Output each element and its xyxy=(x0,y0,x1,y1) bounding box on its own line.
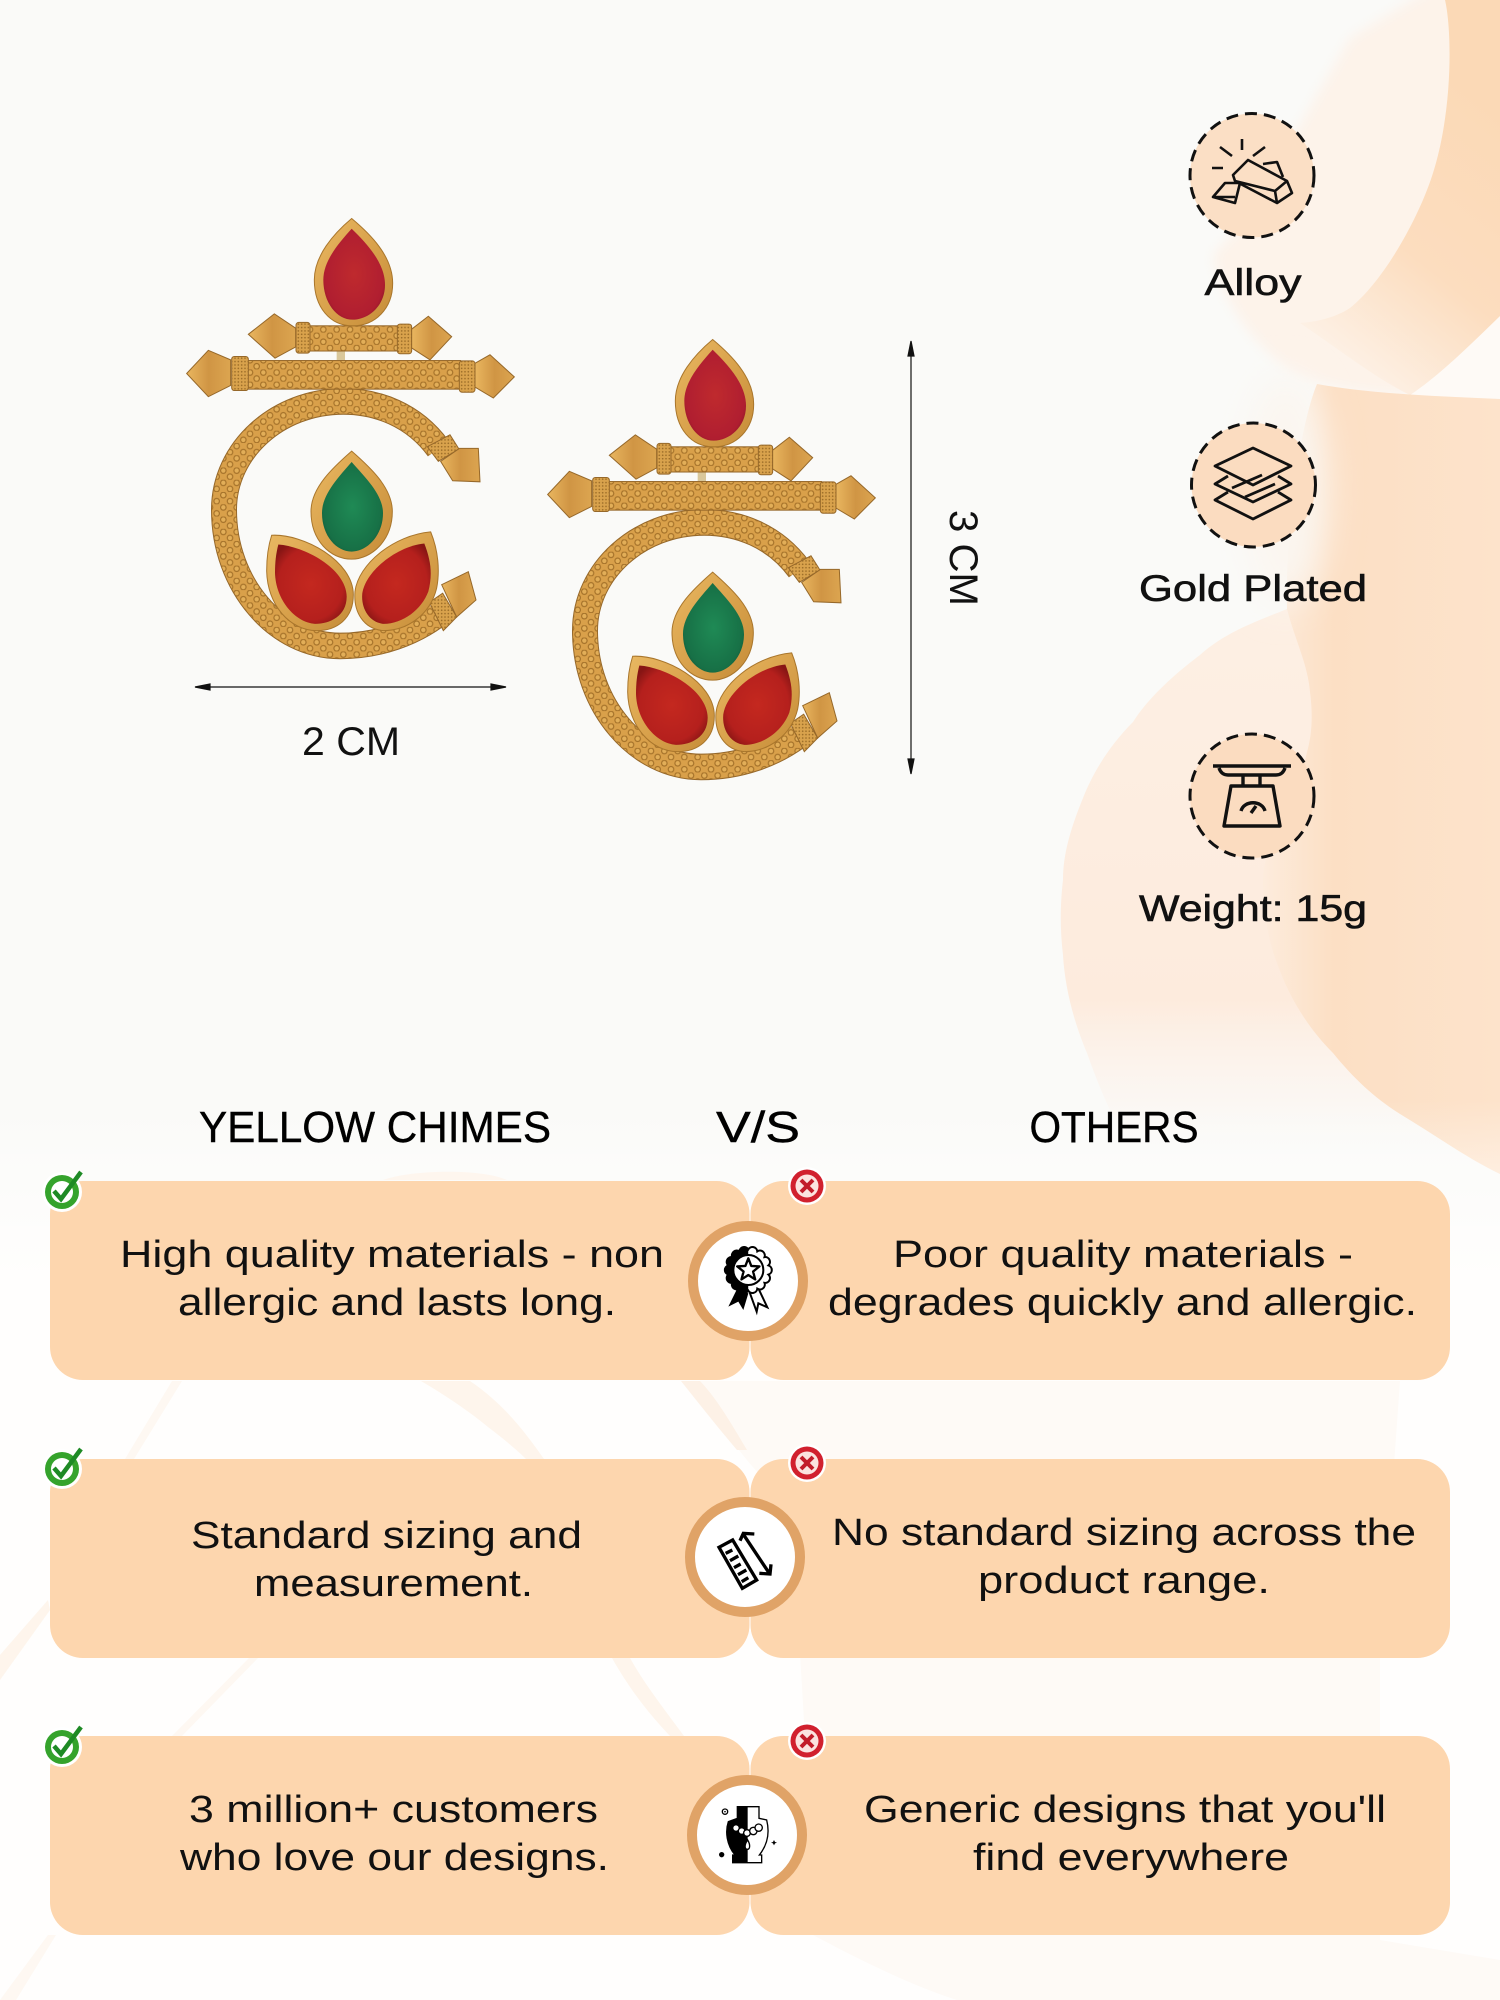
panel: yellow chimes quality xyxy=(50,1181,750,1380)
text: others quality: degrades quickly and allergic. xyxy=(828,1282,1417,1324)
icon: award ribbon medallion xyxy=(693,1226,803,1336)
panel: others sizing xyxy=(750,1459,1450,1658)
earring: right xyxy=(548,340,875,767)
comparison row 2 xyxy=(42,1444,1450,1658)
label: Weight: 15g: Weight: 15g xyxy=(1139,888,1367,929)
heading: V/S: V/S xyxy=(716,1103,800,1152)
height dimension: 3 CM xyxy=(908,341,985,774)
feature: Weight xyxy=(1139,734,1367,929)
icon: check badge xyxy=(42,1449,82,1489)
text: others designs: find everywhere xyxy=(973,1837,1289,1879)
panel: yellow chimes customers xyxy=(50,1736,750,1935)
text: yellow chimes customers: 3 million+ customers xyxy=(189,1789,598,1831)
text: yellow chimes quality: High quality materials - non xyxy=(120,1234,664,1276)
text: others sizing: product range. xyxy=(978,1560,1270,1602)
panel: others designs xyxy=(750,1736,1450,1935)
heading: OTHERS: OTHERS xyxy=(1030,1103,1198,1152)
feature: Alloy xyxy=(1190,114,1314,303)
text: yellow chimes sizing: measurement. xyxy=(254,1563,533,1605)
width dimension: 2 CM xyxy=(195,684,506,764)
icon: cross badge xyxy=(788,1722,826,1760)
text: others sizing: No standard sizing across the xyxy=(832,1512,1416,1554)
arrow: height xyxy=(908,341,914,774)
comparison row 3 xyxy=(42,1722,1450,1935)
panel: others quality xyxy=(750,1181,1450,1380)
icon: necklace on bust xyxy=(692,1780,802,1890)
icon: gold bars xyxy=(1190,114,1314,238)
feature: Gold Plated xyxy=(1139,423,1367,609)
icon: layers xyxy=(1192,423,1316,547)
arrow: width xyxy=(195,684,506,690)
icon: kitchen scale xyxy=(1190,734,1314,858)
icon: check badge xyxy=(42,1727,82,1767)
panel: yellow chimes sizing xyxy=(50,1459,750,1658)
text: others designs: Generic designs that you'll xyxy=(864,1789,1386,1831)
label: 2 CM: 2 CM xyxy=(302,720,400,764)
comparison row 1 xyxy=(42,1167,1450,1380)
icon: ruler with arrow xyxy=(690,1502,800,1612)
icon: cross badge xyxy=(788,1167,826,1205)
icon: check badge xyxy=(42,1172,82,1212)
label: Alloy: Alloy xyxy=(1204,262,1302,303)
text: others quality: Poor quality materials - xyxy=(893,1234,1353,1276)
text: yellow chimes customers: who love our designs. xyxy=(179,1837,609,1879)
text: yellow chimes quality: allergic and lasts long. xyxy=(178,1282,616,1324)
label: 3 CM: 3 CM xyxy=(941,510,985,606)
earring: left xyxy=(187,219,514,646)
icon: cross badge xyxy=(788,1444,826,1482)
text: yellow chimes sizing: Standard sizing and xyxy=(191,1515,582,1557)
label: Gold Plated: Gold Plated xyxy=(1139,568,1367,609)
heading: YELLOW CHIMES: YELLOW CHIMES xyxy=(199,1103,551,1152)
